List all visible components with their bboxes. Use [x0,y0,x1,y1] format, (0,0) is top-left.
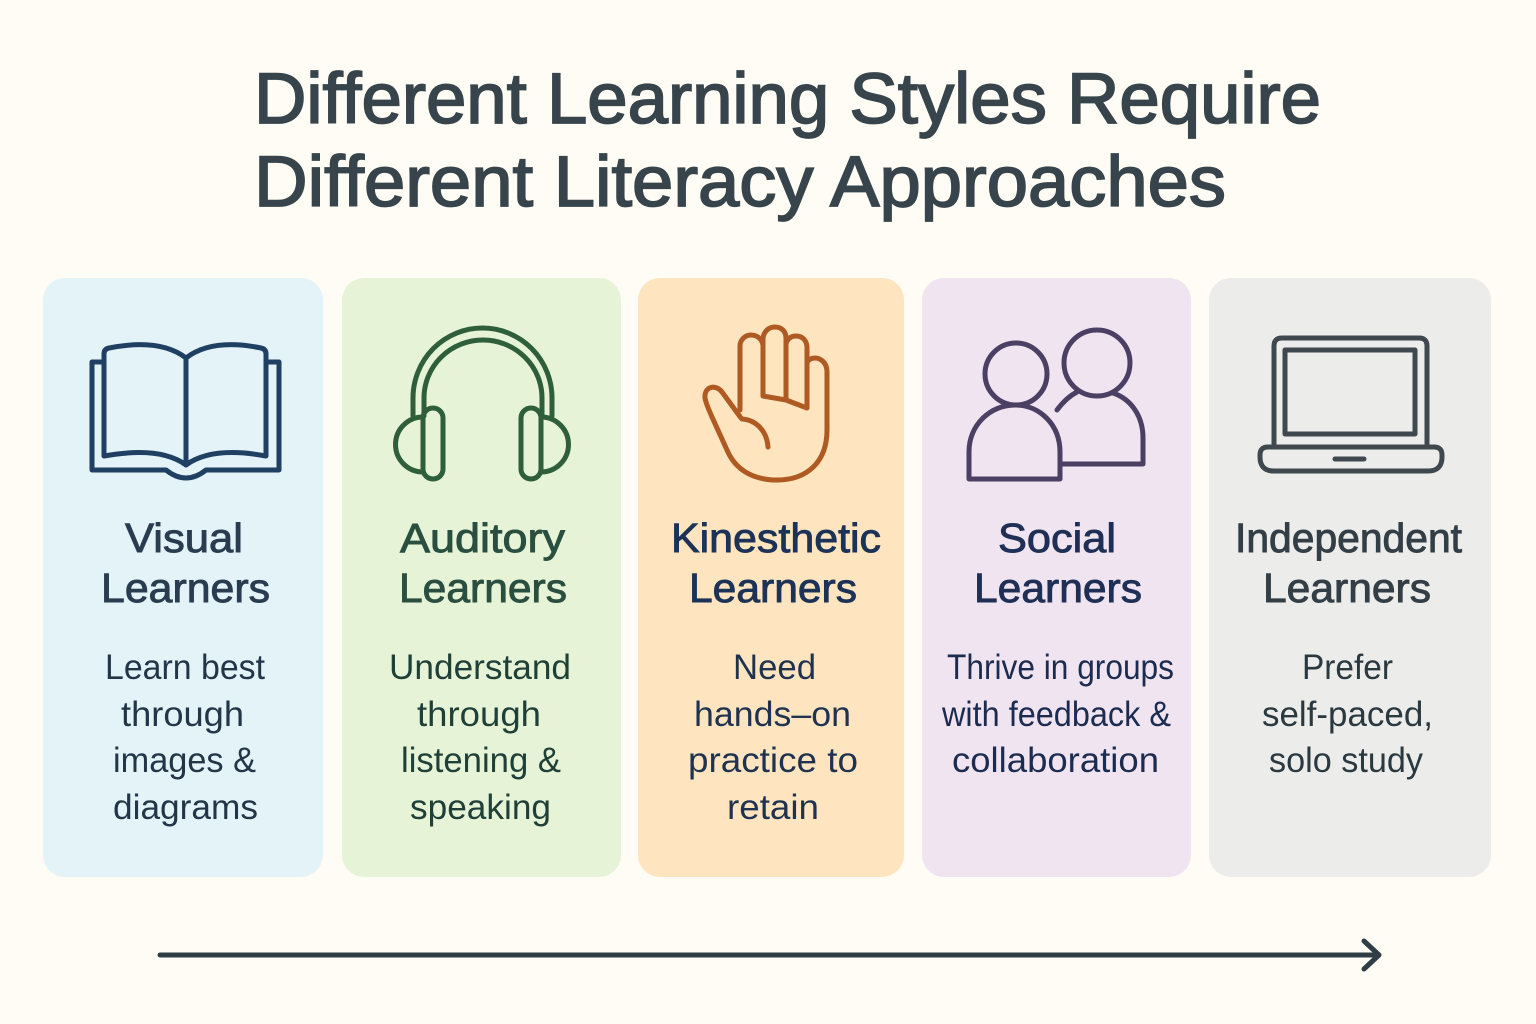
panel: social learners [922,278,1191,877]
panel: auditory learners [342,278,621,877]
icon: headphones [396,328,568,479]
icon: open book [92,345,279,478]
text: kinesthetic description: hands–on [694,695,851,734]
icon: two people [969,330,1143,479]
arrow [160,941,1379,969]
panel: kinesthetic learners [638,278,904,877]
panel: visual learners [43,278,323,877]
text: visual description: diagrams [113,788,258,827]
text: independent description [1262,648,1433,780]
title [254,60,1321,222]
text: social description: with feedback & [941,695,1171,734]
title: Different Literacy Approaches [254,143,1226,222]
text: kinesthetic description: retain [727,788,819,827]
text: visual description: through [121,695,244,734]
text: auditory description: Understand [389,648,571,687]
heading: independent learners: Independent [1235,515,1463,561]
heading: kinesthetic learners: Kinesthetic [671,515,881,561]
text: auditory description: speaking [410,788,551,827]
text: social description: collaboration [952,741,1159,780]
heading: visual learners [101,515,270,611]
text: kinesthetic description [688,648,858,827]
heading: independent learners [1235,515,1463,611]
heading: auditory learners: Auditory [400,515,566,561]
icon: laptop [1260,338,1442,471]
heading: kinesthetic learners [671,515,881,611]
heading: visual learners: Learners [101,565,270,611]
heading: social learners: Learners [974,565,1142,611]
heading: auditory learners: Learners [399,565,567,611]
text: social description [941,648,1174,780]
heading: kinesthetic learners: Learners [689,565,857,611]
text: kinesthetic description: practice to [688,741,858,780]
text: independent description: solo study [1269,741,1423,780]
heading: social learners [974,515,1142,611]
text: visual description: images & [113,741,256,780]
text: independent description: self-paced, [1262,695,1433,734]
heading: visual learners: Visual [125,515,243,561]
icon: raised hand [705,327,827,480]
text: visual description: Learn best [105,648,265,687]
text: auditory description: through [417,695,541,734]
text: independent description: Prefer [1302,648,1393,687]
text: kinesthetic description: Need [733,648,816,687]
heading: auditory learners [399,515,567,611]
text: visual description [105,648,265,827]
panel: independent learners [1209,278,1491,877]
title: Different Learning Styles Require [254,60,1321,139]
heading: independent learners: Learners [1263,565,1431,611]
heading: social learners: Social [998,515,1116,561]
text: social description: Thrive in groups [947,648,1174,687]
text: auditory description [389,648,571,827]
text: auditory description: listening & [401,741,561,780]
